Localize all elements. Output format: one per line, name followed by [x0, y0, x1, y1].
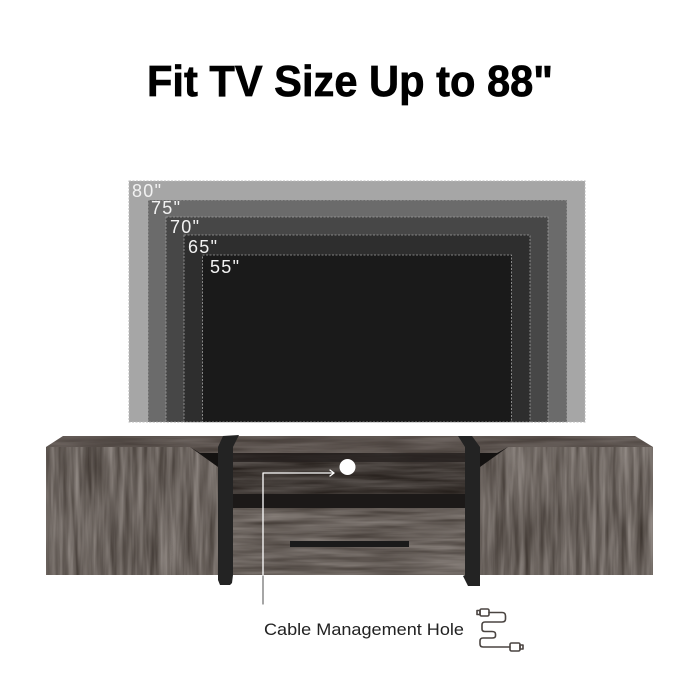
- TV outline: 65 inch: 65": [188, 237, 218, 257]
- center shelf: [233, 494, 465, 509]
- icon: cable: [477, 609, 523, 651]
- shelf shadow: [233, 453, 465, 462]
- right door: [480, 447, 653, 575]
- left black leg: [218, 435, 239, 585]
- drawer front: [233, 508, 465, 575]
- TV stand: [46, 435, 653, 586]
- drawer handle: [290, 541, 409, 547]
- TV outline: 65 inch: [184, 235, 530, 422]
- right black leg: [458, 436, 480, 586]
- left dark cutout: [188, 446, 220, 469]
- TV outline: 80 inch: [129, 181, 585, 422]
- TV outline: 70 inch: [166, 217, 548, 422]
- chart: nested TV size outlines: [129, 181, 585, 422]
- TV outline: 75 inch: 75": [151, 198, 181, 218]
- center back wood panel: [233, 453, 465, 495]
- title: Fit TV Size Up to 88": [147, 57, 553, 106]
- callout label: Cable Management Hole: [264, 620, 464, 639]
- TV outline: 80 inch: 80": [132, 181, 162, 201]
- arrow: pointer to cable hole: [263, 470, 334, 604]
- TV outline: 70 inch: 70": [170, 217, 200, 237]
- left door: [46, 447, 218, 575]
- cable hole: [340, 459, 356, 475]
- TV outline: 55 inch: [202, 255, 512, 422]
- TV outline: 55 inch: 55": [210, 257, 240, 277]
- TV outline: 75 inch: [148, 198, 567, 422]
- top surface: [46, 436, 653, 453]
- right dark cutout: [478, 446, 510, 469]
